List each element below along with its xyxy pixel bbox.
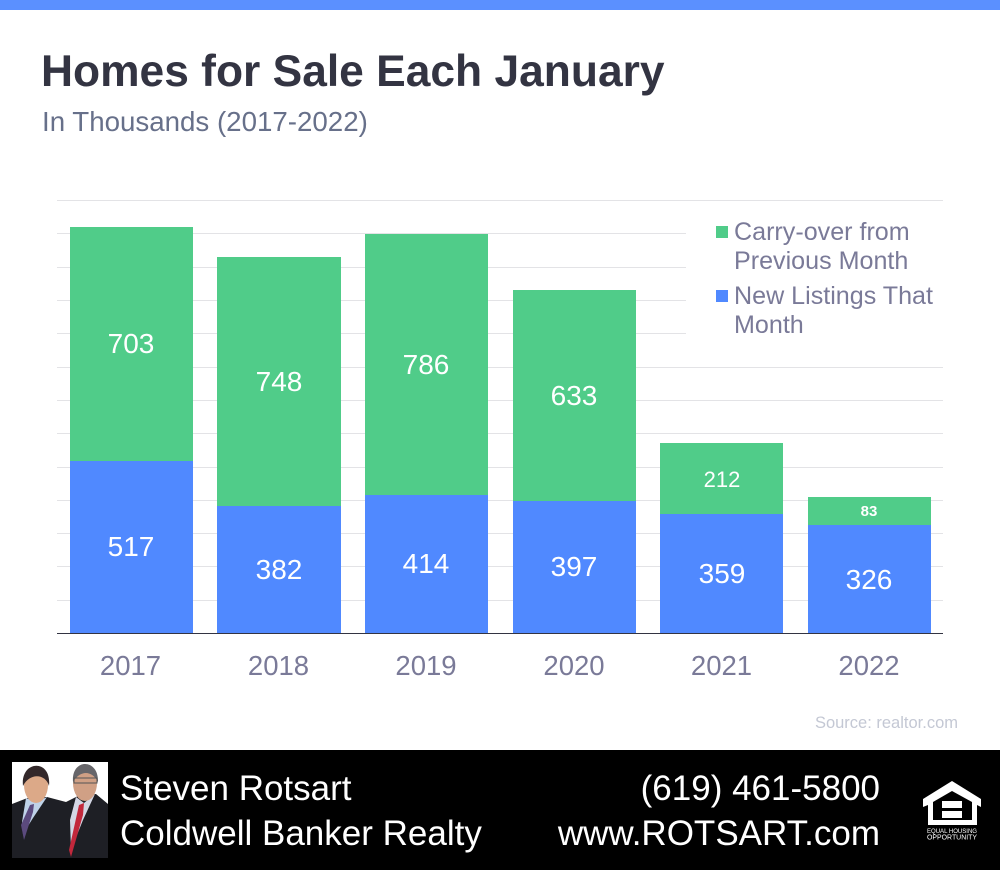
source: Source: realtor.com [815,714,958,732]
x axis labels: 2019 [395,650,457,681]
bar: 2022: 326 [846,564,892,595]
legend [716,218,933,339]
bar: 2017: 703 [108,328,154,359]
footer bar [0,750,1000,870]
legend: Previous Month [734,247,908,275]
bar: 2019 [365,234,488,633]
x axis labels: 2017 [100,650,161,681]
agent details: www.ROTSART.com [557,814,880,853]
agent details: Coldwell Banker Realty [120,814,482,853]
icon: equal housing opportunity: OPPORTUNITY [927,834,977,842]
bar: 2021: 359 [699,558,745,589]
legend: Month [734,311,804,339]
x axis labels: 2020 [543,650,605,681]
bar: 2022 [808,497,931,633]
legend: New Listings That [734,282,933,310]
bar: 2018: 382 [256,554,302,585]
x axis labels [100,650,900,681]
bar: 2022: 83 [861,503,877,520]
subtitle: In Thousands (2017-2022) [42,106,368,137]
agent details: Steven Rotsart [120,769,352,808]
bar: 2020: 633 [551,380,597,411]
agent photo [12,762,108,858]
agent details: (619) 461-5800 [641,769,880,808]
bar: 2020: 397 [551,551,597,582]
x axis labels: 2022 [838,650,900,681]
agent details [120,769,880,853]
x axis labels: 2018 [248,650,309,681]
bar: 2017 [70,227,193,633]
icon: equal housing opportunity: EQUAL HOUSING [927,828,977,835]
x axis labels: 2021 [691,650,752,681]
bar: 2021 [660,443,783,633]
legend: Carry-over from [734,218,910,246]
bar: 2020 [513,290,636,633]
bar: 2017: 517 [108,531,154,562]
bar: 2019: 786 [403,349,449,380]
stacked bar chart [70,227,931,633]
bar: 2021: 212 [704,467,740,492]
bar: 2018 [217,257,341,633]
bar: 2019: 414 [403,548,449,579]
bar: 2018: 748 [256,366,302,397]
title: Homes for Sale Each January [41,47,665,96]
icon: equal housing opportunity [923,781,981,842]
